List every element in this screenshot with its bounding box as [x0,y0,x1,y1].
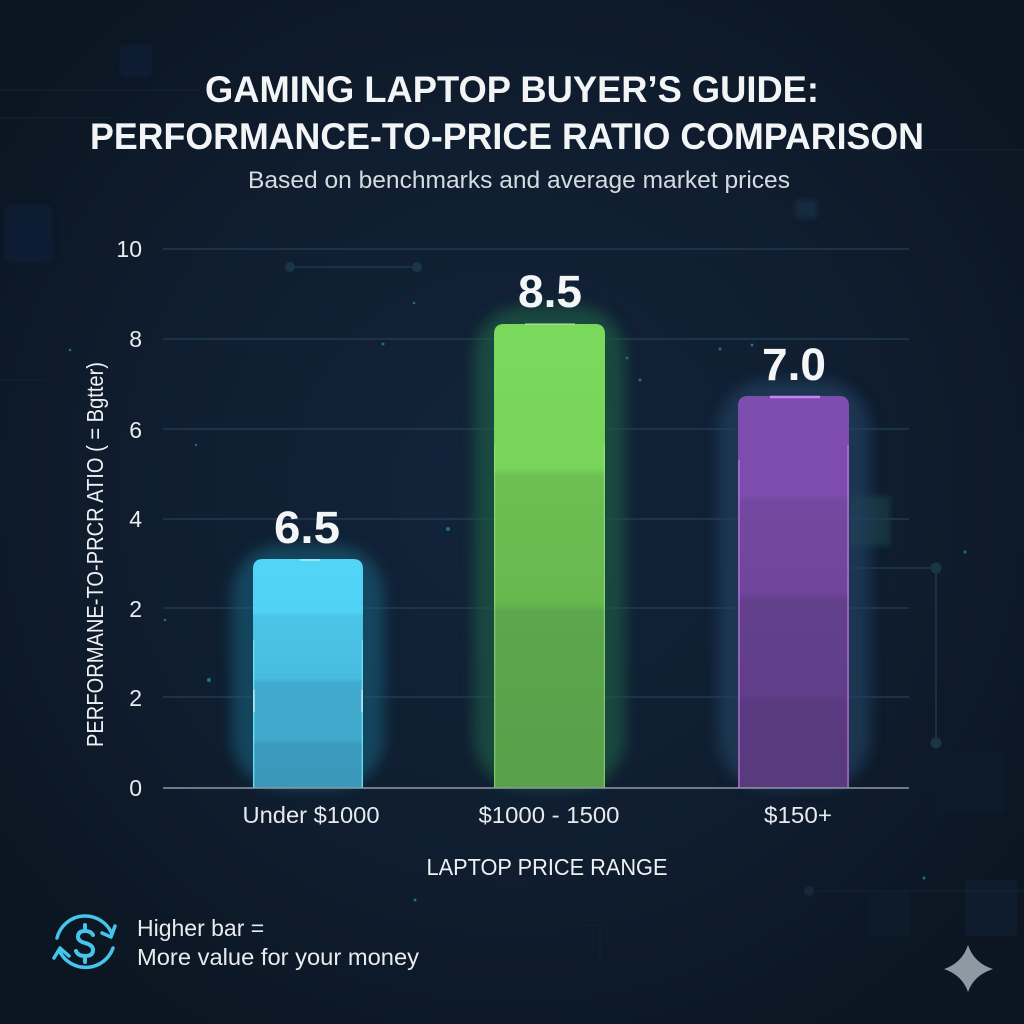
y-axis tick labels: 6 [129,417,142,443]
y-axis tick labels [116,236,142,801]
callout text: Higher bar = [137,915,264,941]
x-axis category labels: $1000 - 1500 [478,802,620,828]
x-axis category labels: $150+ [764,802,832,828]
x-axis line [163,787,909,789]
y-axis tick labels: 2 [129,596,142,622]
x-axis category labels [242,802,832,828]
bar: under $1000 [232,545,384,788]
title: GAMING LAPTOP BUYER’S GUIDE: [205,69,819,110]
x-axis title: LAPTOP PRICE RANGE [426,854,668,880]
value: 6.5: 6.5 [274,502,340,553]
y-axis tick labels: 4 [129,506,142,532]
y-axis tick labels: 8 [129,326,142,352]
chart [82,236,909,880]
y-axis tick labels: 10 [116,236,142,262]
subtitle: Based on benchmarks and average market prices [248,167,790,194]
bar: $1000 - 1500 [474,306,625,788]
callout text: More value for your money [137,944,419,970]
value: 7.0: 7.0 [762,339,826,390]
bar: $150+ [718,380,870,788]
icon: four-point star [944,945,993,992]
y-axis tick labels: 2 [129,685,142,711]
title [90,69,924,157]
title: PERFORMANCE-TO-PRICE RATIO COMPARISON [90,116,924,157]
value: 8.5: 8.5 [518,266,582,317]
x-axis category labels: Under $1000 [242,802,380,828]
y-axis tick labels: 0 [129,775,142,801]
callout [54,915,419,970]
icon: dollar with circular arrows [54,916,115,967]
y-axis title: PERFORMANE-TO-PRCR ATIO ( = Bgtter) [82,362,108,747]
callout text [137,915,419,970]
